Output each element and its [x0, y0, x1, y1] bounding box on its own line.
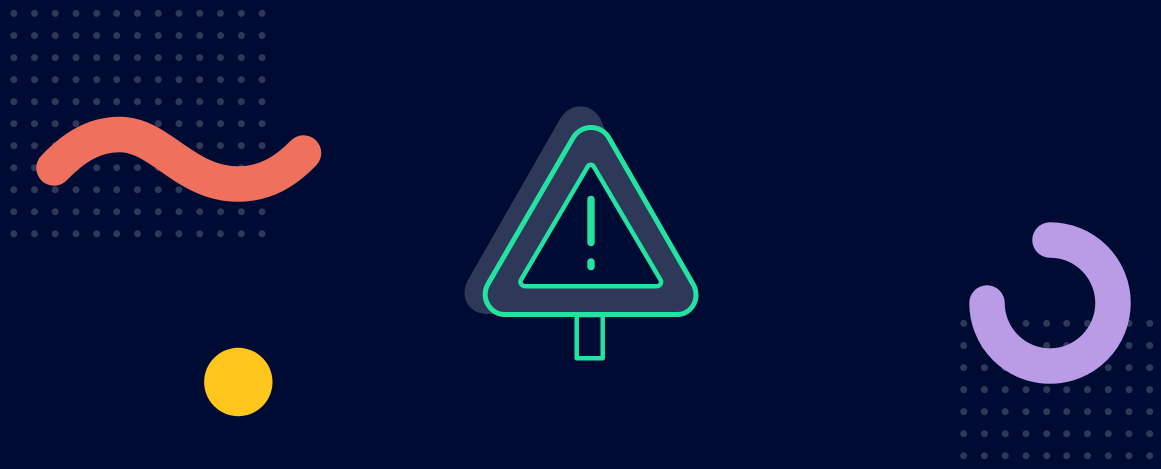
- sign outer triangle: [485, 128, 696, 314]
- dot grid: bottom right: [960, 320, 1153, 459]
- dot grid: top left: [10, 10, 265, 237]
- yellow circle: [204, 348, 272, 416]
- exclamation mark: [587, 196, 595, 270]
- icon: warning sign: [464, 106, 696, 358]
- coral squiggle: [54, 134, 304, 184]
- purple ring arc: [987, 240, 1113, 366]
- sign inner triangle: [521, 165, 661, 286]
- sign post: [577, 315, 603, 358]
- sign shadow: [464, 106, 680, 314]
